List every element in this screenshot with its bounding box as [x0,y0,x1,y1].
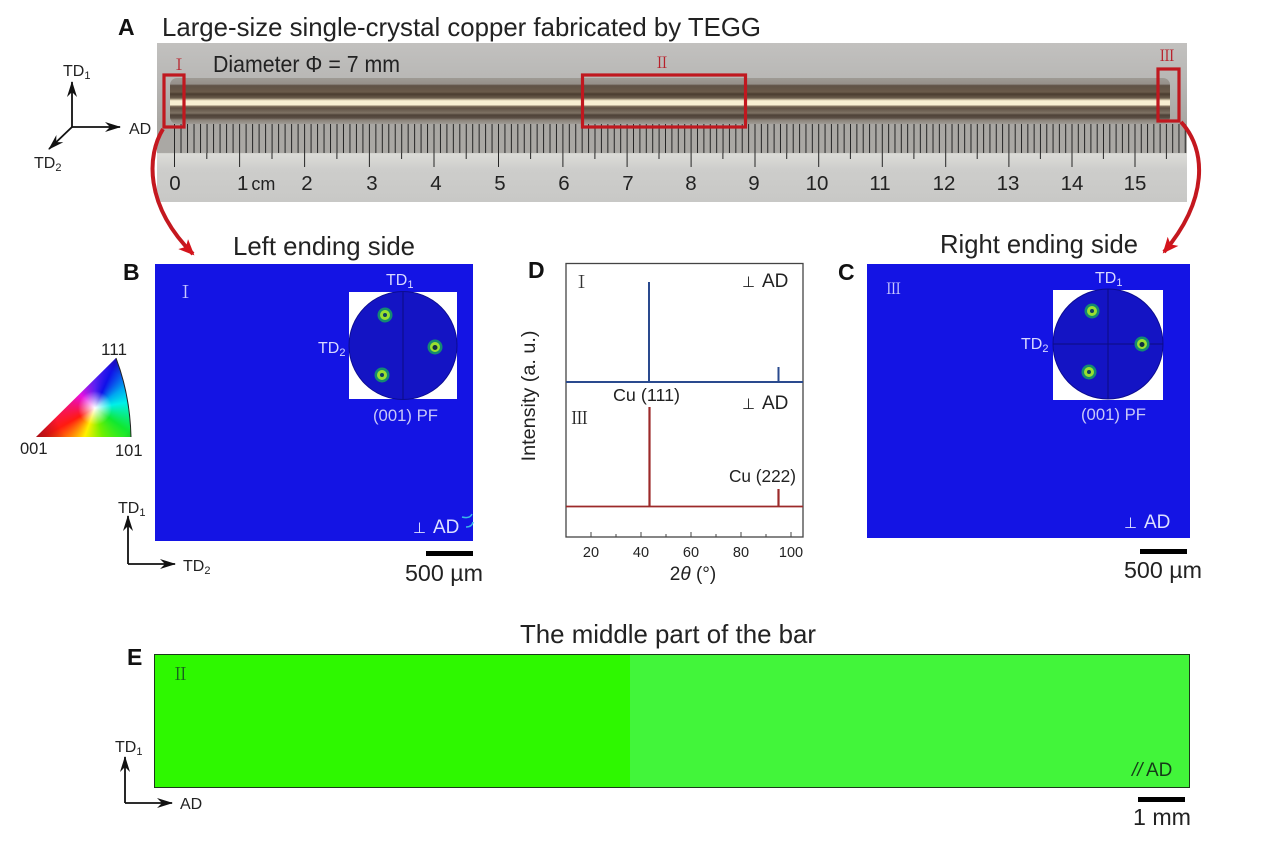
ruler numbers: 2 [301,172,313,195]
axes: TD1 AD: TD [115,739,136,756]
panel B: left end orientation map: ⊥ [413,520,426,537]
panel C: right end orientation map: 1 [1116,277,1122,289]
ruler numbers: 4 [430,172,442,195]
inverse pole figure labels: 001 [20,440,48,458]
panel D: XRD chart: 80 [733,545,749,561]
scale bar B: 500 µm [405,560,483,586]
panel C: right end orientation map: Ⅲ [886,278,901,299]
ruler numbers: 5 [494,172,506,195]
axes: TD1 TD2: TD [118,500,139,517]
panel D: XRD chart: D [528,257,545,283]
panel D: XRD chart: Ⅰ [573,268,590,293]
pole figure inset [1053,289,1163,400]
ruler ticks [174,138,1187,167]
panel D: XRD chart: 20 [583,545,599,561]
inverse pole figure colour triangle [36,358,130,437]
panel D: XRD chart: ⊥ [742,396,755,413]
panel D: XRD chart: AD [762,393,788,414]
panel E: middle orientation map: AD [1146,760,1172,781]
panel D: XRD chart: Ⅲ [571,404,588,429]
region boxes I II III: Ⅲ [1159,45,1175,66]
inverse pole figure labels [20,341,143,460]
right curved arrow [1164,122,1199,252]
copper bar photo with ruler [157,43,1187,202]
tick marks [591,532,791,537]
panel D: XRD chart: Cu (111) [613,385,680,405]
axes: TD1 TD2: 2 [204,565,210,577]
axis triad [34,63,151,174]
ruler numbers: 15 [1124,172,1146,195]
panel D: XRD chart [518,257,803,585]
panel B: left end orientation map: TD [386,272,407,289]
panel D: XRD chart: 2θ (°) [670,564,716,585]
ruler numbers: 10 [806,172,828,195]
pole figure inset [349,292,457,400]
panel D: XRD chart: 100 [779,545,803,561]
panel C: right end orientation map: TD [1095,270,1116,287]
panel D: XRD chart: 60 [683,545,699,561]
axes: TD1 AD [115,739,202,813]
panel C: right end orientation map: C [838,259,855,285]
ruler numbers: 3 [366,172,378,195]
axes: TD1 TD2: 1 [139,507,145,519]
ruler numbers: 11 [869,172,891,195]
panel D: XRD chart: ⊥ [742,274,755,291]
panel E: middle orientation map: Ⅱ [172,660,189,685]
axis triad: AD [129,121,151,138]
ruler numbers: 12 [933,172,955,195]
panel B: left end orientation map [123,259,473,541]
ruler numbers: 0 [169,172,181,195]
panel label A: A [118,14,135,40]
inverse pole figure labels: 111 [101,341,127,359]
ruler numbers [169,172,1146,195]
scale bar C: 500 µm [1124,557,1202,583]
panel B: left end orientation map: TD [318,340,339,357]
ruler numbers: 9 [748,172,760,195]
panel E: middle orientation map: // [1130,760,1144,781]
panel C: right end orientation map [838,259,1190,538]
axes: TD1 TD2 [118,500,210,577]
heading: right ending side: Right ending side [940,231,1138,259]
axis triad: TD [34,155,55,172]
axes: TD1 AD: AD [180,796,202,813]
panel D: XRD chart: 40 [633,545,649,561]
diameter label: Diameter Φ = 7 mm [213,51,400,77]
axes: TD1 TD2: TD [183,558,204,575]
ruler numbers: 1cm [237,172,275,195]
panel C: right end orientation map: ⊥ [1124,515,1137,532]
heading: middle part: The middle part of the bar [520,621,816,649]
panel B: left end orientation map: Ⅰ [177,278,194,303]
axis triad: TD [63,63,84,80]
trace III [566,407,803,506]
heading: left ending side: Left ending side [233,233,415,261]
axes: TD1 AD: 1 [136,746,142,758]
region boxes I II III: Ⅱ [654,52,670,73]
region boxes I II III: Ⅰ [171,54,187,75]
left curved arrow [153,129,193,254]
ruler numbers: 6 [558,172,570,195]
panel B: left end orientation map: B [123,259,140,285]
panel B: left end orientation map: (001) PF [373,406,438,425]
ruler numbers: 14 [1061,172,1083,195]
panel E: middle orientation map [127,644,1190,788]
axis triad: 2 [55,162,61,174]
panel C: right end orientation map: 2 [1042,343,1048,355]
panel D: XRD chart: AD [762,271,788,292]
panel D: XRD chart: Intensity (a. u.) [518,331,540,461]
panel C: right end orientation map: AD [1144,512,1170,533]
panel C: right end orientation map: TD [1021,336,1042,353]
title: Large-size single-crystal copper fabricated by TEGG [162,14,761,42]
panel E: middle orientation map: E [127,644,142,670]
region boxes I II III [164,45,1179,127]
panel D: XRD chart: Cu (222) [729,466,796,486]
ruler numbers: 7 [622,172,634,195]
panel B: left end orientation map: 1 [407,279,413,291]
axis triad: 1 [84,70,90,82]
panel B: left end orientation map: AD [433,517,459,538]
panel B: left end orientation map: 2 [339,347,345,359]
inverse pole figure labels: 101 [115,442,143,460]
scale bar E: 1 mm [1133,804,1191,830]
ruler numbers: 8 [685,172,697,195]
trace I [566,282,803,382]
ruler numbers: 13 [997,172,1019,195]
panel C: right end orientation map: (001) PF [1081,405,1146,424]
